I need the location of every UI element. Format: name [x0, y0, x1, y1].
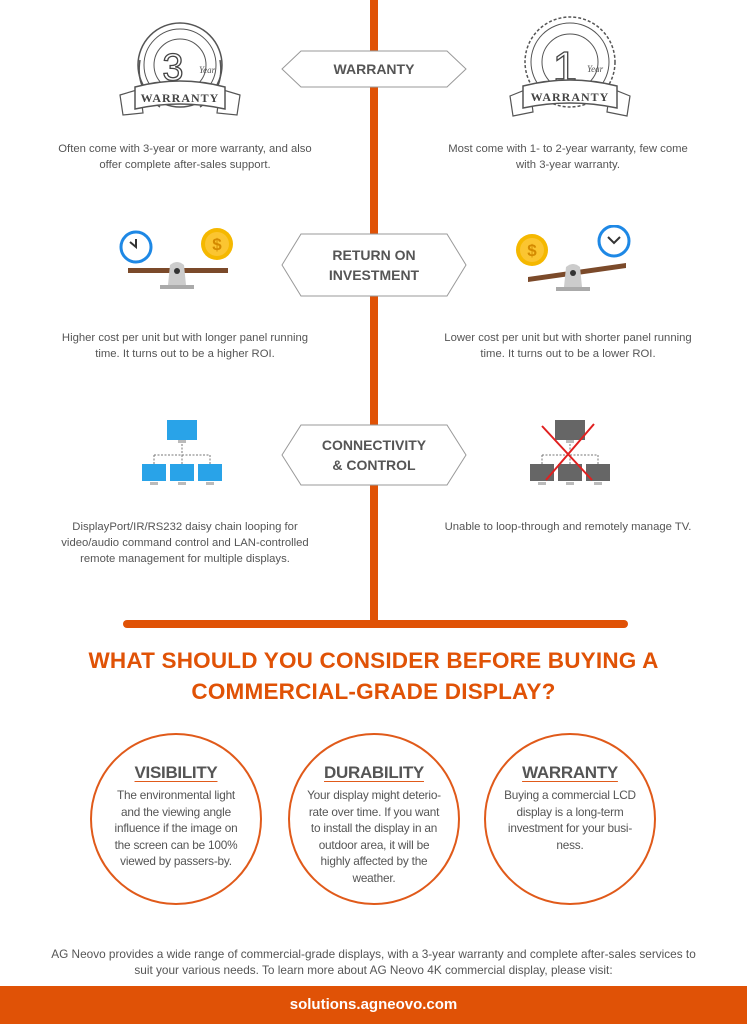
- circle: durability: weather.: [352, 870, 396, 884]
- label: return on investment: RETURN ON: [332, 247, 416, 263]
- circle: visibility: influence if the image on: [115, 821, 237, 835]
- text: roi left: time. It turns out to be a higher ROI.: [95, 348, 275, 360]
- timeline horizontal bar: [123, 620, 628, 628]
- label: connectivity: [282, 424, 466, 486]
- icon: 1-year warranty badge: [509, 16, 631, 117]
- circle: durability: Your display might deterio-: [307, 788, 441, 802]
- text: connectivity left: remote management for multiple displays.: [80, 553, 290, 565]
- icon: 3-year warranty badge: Year: [199, 65, 216, 75]
- label: connectivity: CONNECTIVITY: [322, 437, 426, 453]
- text: connectivity left: DisplayPort/IR/RS232 daisy chain looping for: [72, 521, 298, 533]
- heading: WHAT SHOULD YOU CONSIDER BEFORE BUYING A: [88, 648, 659, 673]
- heading: [88, 648, 659, 704]
- circle: warranty: investment for your busi-: [508, 821, 632, 835]
- circle: durability: outdoor area, it will be: [319, 838, 429, 852]
- icon: scale clock heavy: $: [212, 235, 222, 254]
- footer paragraph: [51, 947, 696, 977]
- circle: visibility: and the viewing angle: [121, 804, 231, 818]
- label: connectivity: & CONTROL: [332, 457, 416, 473]
- icon: 1-year warranty badge: 1: [553, 43, 577, 92]
- text: roi left: [62, 332, 308, 360]
- circle: visibility: VISIBILITY: [135, 763, 217, 782]
- icon: 1-year warranty badge: WARRANTY: [531, 90, 609, 104]
- text: warranty right: with 3-year warranty.: [516, 159, 620, 171]
- circle: warranty: WARRANTY: [522, 763, 618, 782]
- footer paragraph: AG Neovo provides a wide range of commercial-grade displays, with a 3-year warranty and complete after-sales services to: [51, 947, 696, 961]
- icon: scale coin heavy: $: [527, 241, 537, 260]
- circle: visibility: viewed by passers-by.: [120, 854, 232, 868]
- label: warranty: [281, 50, 467, 88]
- circle: warranty: display is a long-term: [516, 804, 624, 818]
- circle: visibility: The environmental light: [117, 788, 235, 802]
- text: connectivity left: video/audio command control and LAN-controlled: [61, 537, 309, 549]
- circle: visibility: the screen can be 100%: [115, 838, 237, 852]
- text: roi right: [444, 332, 692, 360]
- icon: 3-year warranty badge: WARRANTY: [141, 91, 219, 105]
- circle: warranty: Buying a commercial LCD: [504, 788, 636, 802]
- text: warranty right: [448, 143, 688, 171]
- label: warranty: WARRANTY: [334, 61, 414, 77]
- circle: durability: to install the display in an: [311, 821, 437, 835]
- text: warranty left: offer complete after-sales support.: [99, 159, 271, 171]
- circle: warranty: [484, 733, 656, 905]
- circle: durability: rate over time. If you want: [309, 804, 439, 818]
- circle: warranty: ness.: [556, 838, 584, 852]
- label: return on investment: INVESTMENT: [329, 267, 419, 283]
- footer paragraph: suit your various needs. To learn more about AG Neovo 4K commercial display, please visit:: [134, 963, 613, 977]
- icon: scale clock heavy: [120, 228, 233, 289]
- icon: 1-year warranty badge: Year: [587, 64, 604, 74]
- label: return on investment: [282, 234, 466, 296]
- heading: COMMERCIAL-GRADE DISPLAY?: [191, 679, 556, 704]
- icon: scale coin heavy: [516, 225, 630, 291]
- circle: durability: highly affected by the: [321, 854, 427, 868]
- text: connectivity left: [61, 521, 309, 565]
- text: roi left: Higher cost per unit but with longer panel running: [62, 332, 308, 344]
- text: warranty left: [58, 143, 312, 171]
- icon: connected monitors: [142, 420, 222, 485]
- text: connectivity right: Unable to loop-through and remotely manage TV.: [445, 521, 691, 533]
- footer bar: solutions.agneovo.com: [290, 996, 457, 1013]
- circle: durability: [288, 733, 460, 905]
- text: roi right: time. It turns out to be a lower ROI.: [480, 348, 656, 360]
- footer bar: [0, 986, 747, 1024]
- icon: 3-year warranty badge: 3: [162, 47, 184, 89]
- text: roi right: Lower cost per unit but with shorter panel running: [444, 332, 692, 344]
- circle: visibility: [90, 733, 262, 905]
- timeline vertical line: [370, 0, 378, 628]
- circle: durability: DURABILITY: [324, 763, 424, 782]
- text: warranty left: Often come with 3-year or more warranty, and also: [58, 143, 312, 155]
- icon: 3-year warranty badge: [119, 22, 241, 116]
- icon: disconnected monitors crossed: [530, 420, 610, 485]
- text: warranty right: Most come with 1- to 2-year warranty, few come: [448, 143, 688, 155]
